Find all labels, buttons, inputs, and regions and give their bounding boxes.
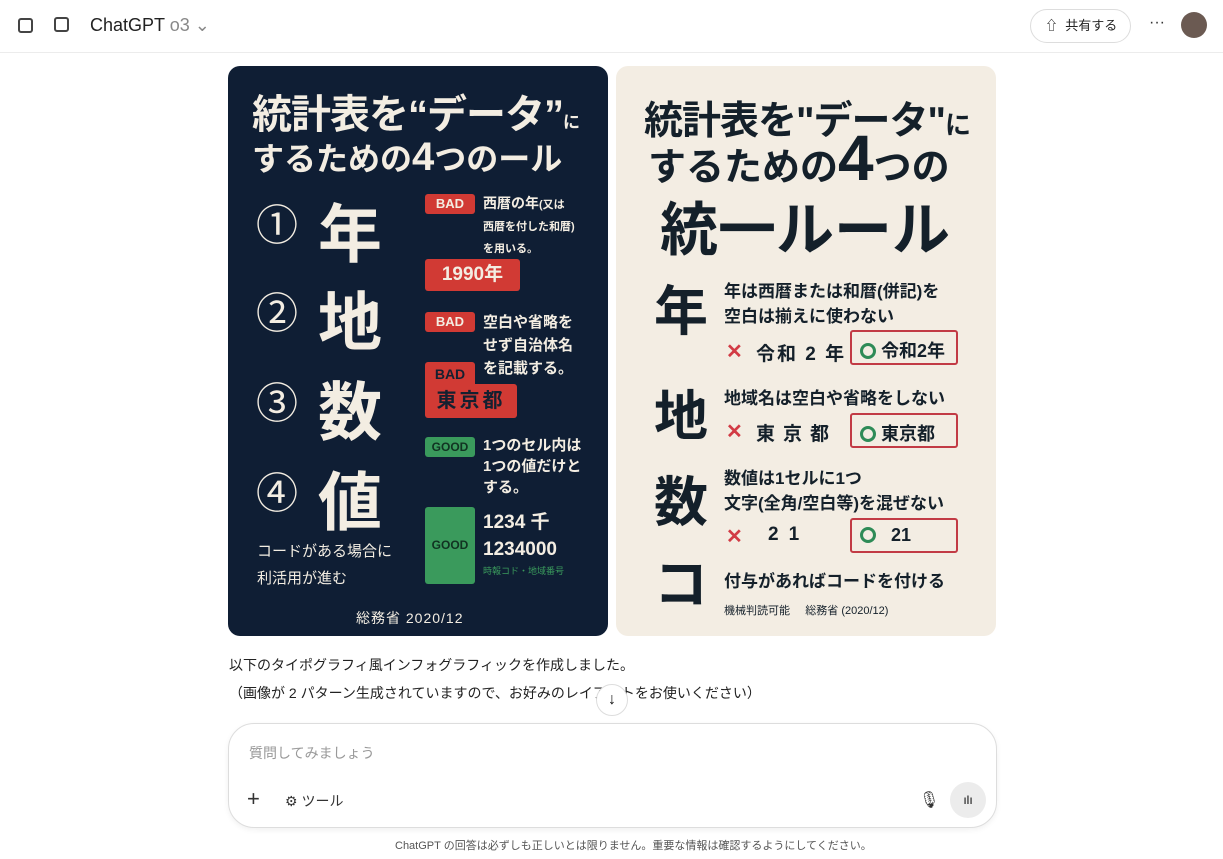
rule list: 年	[318, 199, 382, 271]
panel: dark infographic: 1つの値だけと	[483, 458, 581, 475]
panel: light infographic	[616, 66, 996, 636]
title: 統計表を“データ”に	[252, 93, 579, 137]
scroll down button	[596, 684, 628, 716]
panel: dark infographic: を用いる。	[483, 243, 538, 255]
assistant message	[229, 657, 761, 701]
row: code	[654, 555, 945, 617]
scroll down button: ↓	[608, 691, 616, 708]
rule list	[256, 199, 382, 539]
avatar	[1181, 12, 1207, 38]
footer source: 総務省 2020/12	[356, 610, 464, 626]
row: code: 付与があればコードを付ける	[724, 572, 945, 591]
share button	[1030, 9, 1131, 43]
row: year: ✕	[726, 341, 743, 363]
panel: dark infographic: 空白や省略を	[483, 314, 573, 331]
row: code: 機械判読可能 総務省 (2020/12)	[724, 605, 888, 617]
row: year: 空白は揃えに使わない	[724, 307, 894, 326]
rule list: ①	[256, 202, 298, 249]
panel: dark infographic: 1234000	[483, 539, 557, 560]
panel: dark infographic: を記載する。	[483, 360, 573, 377]
row: area: 東京都	[756, 424, 837, 445]
rule list: ④	[256, 470, 298, 517]
rule 3	[425, 437, 475, 457]
row: number: 数値は1セルに1つ	[724, 469, 862, 488]
title: 統計表を"データ"に	[644, 100, 970, 143]
icon: new chat	[54, 17, 69, 32]
share button: ⇧ 共有する	[1045, 18, 1117, 33]
row: number: 21	[768, 524, 809, 545]
rule 3: GOOD	[432, 440, 468, 454]
top bar	[0, 0, 1223, 53]
icon: sidebar	[18, 18, 33, 33]
rule 1	[425, 194, 475, 214]
note	[257, 543, 392, 587]
rule 2	[425, 312, 475, 332]
assistant message: （画像が 2 パターン生成されていますので、お好みのレイアウトをお使いください）	[229, 685, 761, 701]
panel: dark infographic: GOOD	[432, 538, 468, 552]
row: number: 文字(全角/空白等)を混ぜない	[724, 494, 944, 513]
input box: ⚙ ツール	[285, 793, 343, 809]
rule list: ③	[256, 380, 298, 427]
panel: dark infographic	[228, 66, 608, 636]
bad example box	[425, 362, 517, 418]
row: year	[654, 282, 958, 365]
bad example box: BAD	[435, 366, 465, 382]
row: year: 年	[654, 282, 708, 342]
panel: dark infographic: 西暦の年(又は	[483, 195, 565, 211]
model name: ChatGPT o3 ⌄	[90, 15, 210, 35]
row: code: コ	[654, 555, 708, 615]
disclaimer: ChatGPT の回答は必ずしも正しいとは限りません。重要な情報は確認するようにしてください。	[395, 840, 872, 852]
note: コードがある場合に	[257, 543, 392, 560]
panel: dark infographic: せず自治体名	[483, 337, 573, 354]
row: area: 地域名は空白や省略をしない	[724, 389, 945, 408]
row: number: 21	[891, 525, 911, 545]
row: area: 東京都	[881, 424, 935, 444]
panel: dark infographic: 1990年	[442, 264, 503, 285]
panel: dark infographic: する。	[483, 479, 528, 496]
more menu: ···	[1149, 14, 1165, 31]
bad example box: 東京都	[436, 390, 506, 412]
note: 利活用が進む	[257, 570, 347, 587]
title line 3: 統一ルール	[660, 198, 950, 263]
row: year: 年は西暦または和暦(併記)を	[724, 282, 939, 301]
assistant message: 以下のタイポグラフィ風インフォグラフィックを作成しました。	[229, 657, 634, 673]
input box: 質問してみましょう	[249, 745, 375, 761]
rule 2: BAD	[436, 314, 464, 329]
rule list: 地	[318, 287, 382, 359]
panel: dark infographic: 1つのセル内は	[483, 437, 581, 454]
row: area: 地	[654, 387, 708, 447]
rule list: ②	[256, 290, 298, 337]
row: year: 令和2年	[881, 341, 945, 361]
rule list: 数	[318, 377, 382, 449]
panel: dark infographic: 1234 千	[483, 512, 550, 533]
input box	[228, 723, 997, 828]
rule list: 値	[318, 467, 382, 539]
row: number: 数	[654, 473, 708, 533]
row: year: 令和 2 年	[756, 344, 846, 365]
row: number	[654, 469, 958, 553]
row: area: ✕	[726, 421, 743, 443]
input box: ılı	[963, 793, 973, 807]
subtitle: するための4つの	[648, 122, 950, 194]
panel: dark infographic: 西暦を付した和暦)	[483, 221, 575, 233]
row: number: ✕	[726, 526, 743, 548]
row: area	[654, 387, 958, 448]
subtitle: するための4つのール	[252, 135, 562, 179]
input box: 🎙	[919, 792, 939, 809]
panel: dark infographic: 時報コド・地域番号	[483, 566, 564, 576]
input box: +	[247, 786, 260, 811]
rule 1: BAD	[436, 196, 464, 211]
